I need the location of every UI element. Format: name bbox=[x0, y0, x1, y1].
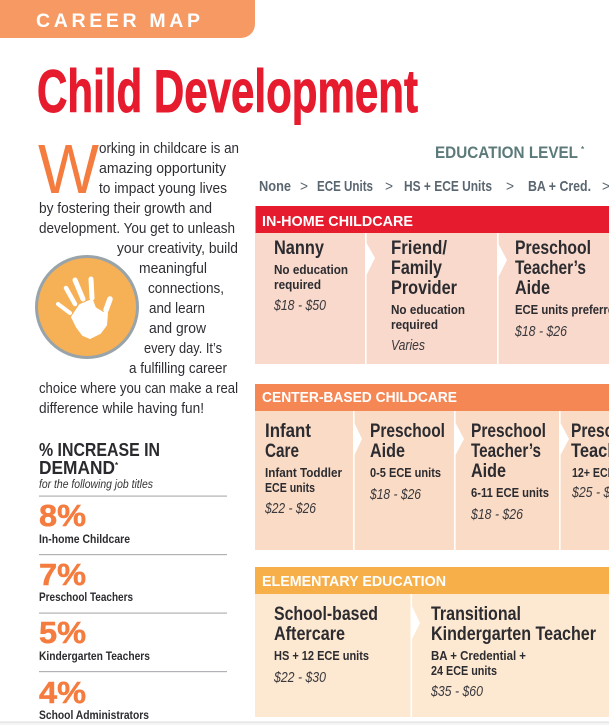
job: infant care: ECE units bbox=[265, 480, 315, 495]
band heading bbox=[255, 567, 609, 594]
demand heading: DEMAND bbox=[39, 457, 115, 478]
header tab: career map bbox=[0, 0, 255, 38]
intro lines: and learn bbox=[149, 300, 205, 317]
job: preschool aide bbox=[369, 420, 445, 503]
job: nanny: Nanny bbox=[274, 237, 324, 259]
education level scale bbox=[259, 178, 609, 195]
stat: preschool teachers 7%: 7% bbox=[39, 557, 86, 592]
job: school-based aftercare: $22 - $30 bbox=[273, 670, 326, 686]
stat: preschool teachers 7%: Preschool Teachers bbox=[39, 590, 133, 604]
intro lines: development. You get to unleash bbox=[39, 220, 235, 237]
band heading: IN-HOME CHILDCARE bbox=[262, 213, 413, 230]
job: preschool teacher's aide: $18 - $26 bbox=[470, 507, 524, 523]
demand heading bbox=[39, 439, 160, 491]
stat: in-home childcare 8%: In-home Childcare bbox=[39, 532, 130, 546]
band heading bbox=[256, 206, 609, 233]
job: preschool teacher's aide bbox=[514, 237, 609, 340]
stat: in-home childcare 8% bbox=[39, 498, 130, 546]
panel: elementary education bbox=[255, 567, 609, 717]
job: preschool teacher's aide: $18 - $26 bbox=[514, 324, 568, 340]
job: transitional kindergarten teacher: Transitional bbox=[431, 603, 521, 625]
tab label: CAREER MAP bbox=[36, 10, 200, 32]
job: transitional kindergarten teacher: 24 ECE units bbox=[431, 663, 497, 678]
intro lines: orking in childcare is an bbox=[99, 140, 239, 157]
job: preschool teacher's aide: Teacher’s bbox=[515, 257, 586, 279]
stat: kindergarten teachers 5%: Kindergarten Teachers bbox=[39, 649, 150, 663]
intro lines: difference while having fun! bbox=[39, 400, 204, 417]
job: friend/family provider: required bbox=[391, 317, 438, 332]
intro lines: your creativity, build bbox=[117, 240, 238, 257]
arrow bbox=[412, 606, 420, 639]
job: friend/family provider: No education bbox=[391, 302, 465, 317]
stat: kindergarten teachers 5% bbox=[39, 615, 150, 663]
job: nanny: required bbox=[274, 277, 321, 292]
education level scale: HS + ECE Units bbox=[404, 178, 492, 195]
icon: white handprint in orange circle bbox=[36, 256, 138, 358]
% increase in demand section bbox=[39, 439, 227, 722]
education level scale: > bbox=[300, 178, 308, 195]
education level scale: > bbox=[385, 178, 393, 195]
drop cap: W bbox=[38, 130, 99, 208]
intro lines: and grow bbox=[149, 320, 206, 337]
education level scale: None bbox=[259, 178, 291, 195]
band heading bbox=[255, 384, 609, 411]
intro lines: connections, bbox=[148, 280, 224, 297]
stat: in-home childcare 8%: 8% bbox=[39, 498, 86, 533]
demand heading: % INCREASE IN bbox=[39, 439, 160, 460]
intro lines: a fulfilling career bbox=[129, 360, 227, 377]
education level scale: BA + Cred. bbox=[528, 178, 591, 195]
job: nanny: $18 - $50 bbox=[273, 298, 326, 314]
job: transitional kindergarten teacher: $35 - $60 bbox=[430, 684, 483, 700]
job: school-based aftercare: Aftercare bbox=[274, 623, 345, 645]
intro lines: by fostering their growth and bbox=[39, 200, 212, 217]
job: preschool aide: $18 - $26 bbox=[369, 487, 422, 503]
arrow bbox=[560, 422, 569, 456]
job: infant care bbox=[264, 420, 342, 517]
job: infant care: $22 - $26 bbox=[264, 501, 317, 517]
job: nanny bbox=[273, 237, 348, 314]
stat: school administrators 4% bbox=[39, 675, 149, 722]
stat: school administrators 4%: School Administrators bbox=[39, 708, 149, 722]
demand heading: for the following job titles bbox=[39, 479, 153, 491]
stat: school administrators 4%: 4% bbox=[39, 675, 86, 710]
job: infant care: Care bbox=[265, 440, 299, 462]
intro lines: to impact young lives bbox=[99, 180, 227, 197]
arrow bbox=[455, 422, 464, 456]
stat: kindergarten teachers 5%: 5% bbox=[39, 615, 86, 650]
intro lines: meaningful bbox=[139, 260, 207, 277]
job: preschool teacher's aide: Aide bbox=[515, 277, 550, 299]
job: infant care: Infant Toddler bbox=[265, 465, 342, 480]
arrow bbox=[498, 243, 507, 278]
job: infant care: Infant bbox=[265, 420, 311, 442]
job: friend/family provider bbox=[391, 237, 465, 354]
arrow bbox=[366, 242, 375, 276]
band heading: CENTER-BASED CHILDCARE bbox=[262, 389, 457, 406]
arrow bbox=[354, 422, 362, 456]
stat: preschool teachers 7% bbox=[39, 557, 133, 604]
job: preschool teacher's aide: Teacher’s bbox=[471, 440, 541, 462]
intro lines: amazing opportunity bbox=[99, 160, 226, 177]
title: Child Development bbox=[37, 58, 418, 125]
education level heading: EDUCATION LEVEL bbox=[435, 144, 578, 162]
job: preschool aide: 0-5 ECE units bbox=[370, 465, 441, 480]
job: preschool teacher's aide: Aide bbox=[471, 460, 506, 482]
job: friend/family provider: Varies bbox=[391, 338, 425, 354]
job: school-based aftercare: HS + 12 ECE units bbox=[274, 648, 369, 663]
education level scale: ECE Units bbox=[317, 178, 373, 195]
job: transitional kindergarten teacher: BA + Credential + bbox=[431, 648, 526, 663]
demand heading: * bbox=[115, 461, 119, 470]
job: friend/family provider: Provider bbox=[391, 277, 457, 299]
band heading: ELEMENTARY EDUCATION bbox=[262, 573, 446, 590]
education level heading: * bbox=[581, 145, 585, 154]
job: preschool teacher's aide: Preschool bbox=[471, 420, 546, 442]
job: preschool aide: Aide bbox=[370, 440, 405, 462]
job: nanny: No education bbox=[274, 262, 348, 277]
job: preschool teacher's aide: 6-11 ECE units bbox=[471, 485, 549, 500]
job: transitional kindergarten teacher bbox=[430, 603, 596, 700]
panel: in-home childcare bbox=[255, 206, 609, 364]
job: friend/family provider: Friend/ bbox=[391, 237, 447, 259]
job: preschool aide: Preschool bbox=[370, 420, 445, 442]
job: preschool teacher's aide bbox=[470, 420, 549, 523]
intro text block bbox=[38, 130, 239, 417]
intro lines bbox=[39, 140, 239, 417]
panel: center-based childcare bbox=[255, 384, 609, 550]
job: friend/family provider: Family bbox=[391, 257, 442, 279]
job: preschool teacher's aide: Preschool bbox=[515, 237, 591, 259]
job: school-based aftercare bbox=[273, 603, 378, 686]
job: preschool teacher bbox=[571, 420, 609, 501]
intro lines: every day. It’s bbox=[144, 340, 222, 357]
education level scale: > bbox=[506, 178, 514, 195]
job: school-based aftercare: School-based bbox=[274, 603, 378, 625]
intro lines: choice where you can make a real bbox=[39, 380, 238, 397]
